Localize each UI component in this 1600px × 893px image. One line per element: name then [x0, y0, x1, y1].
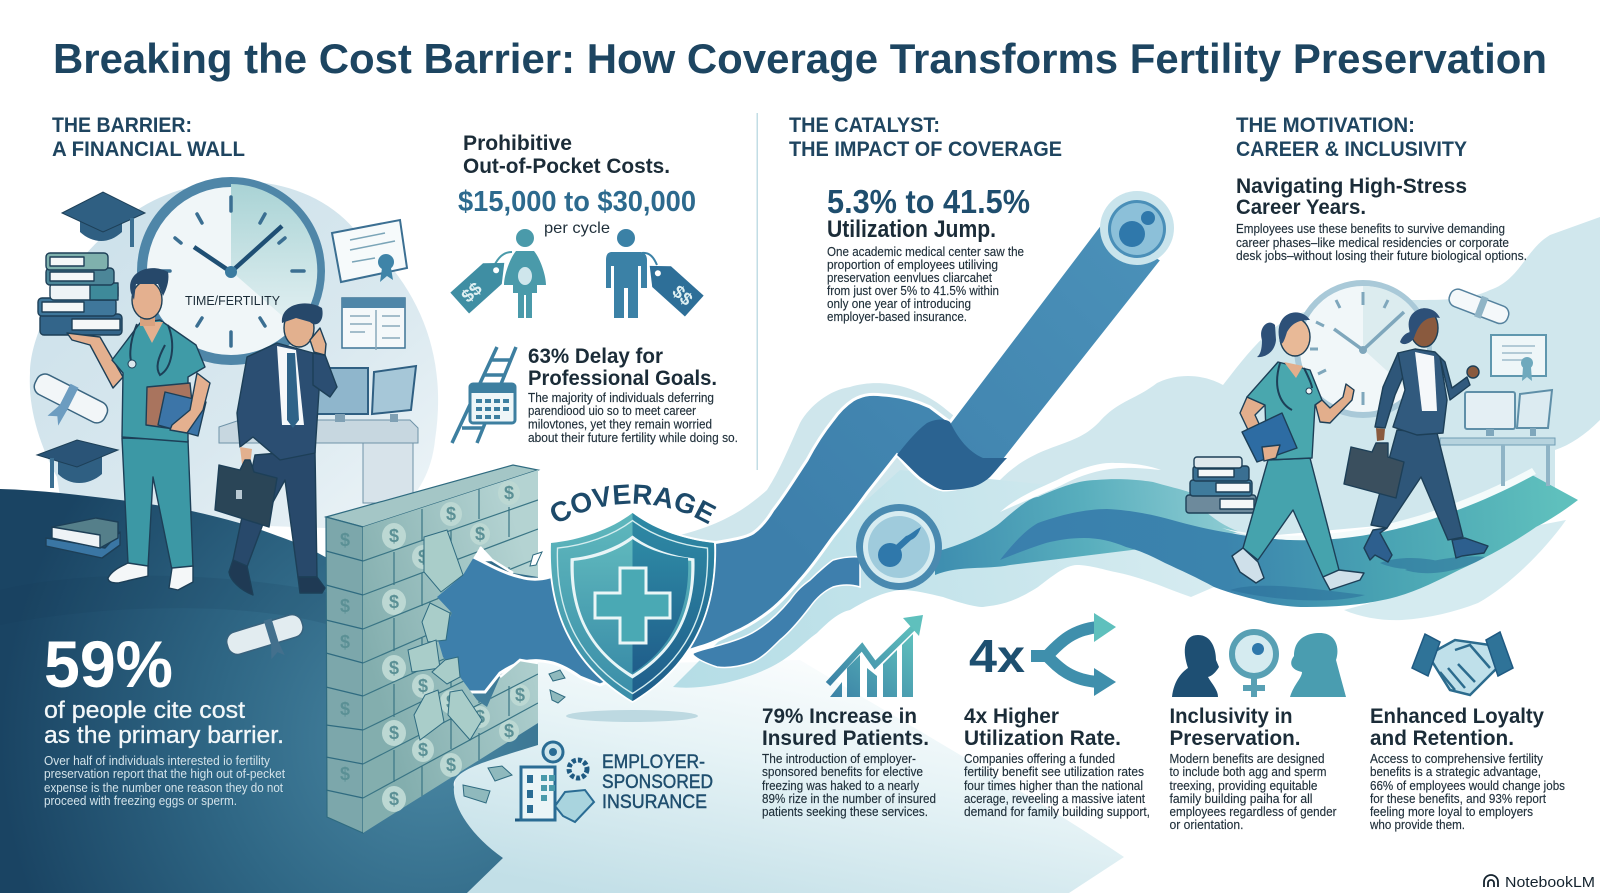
wall of money bricks with break: $ — [389, 592, 399, 612]
floor shadow — [0, 576, 340, 625]
text block: high-stress career years: Navigating High-Stress — [1236, 175, 1467, 198]
coverage arc text: COVERAGE — [551, 484, 716, 524]
text block: high-stress career years: Career Years. — [1236, 196, 1366, 219]
text block: loyalty and retention: who provide them. — [1369, 817, 1465, 832]
ribbon: teal band past sperm circle — [935, 479, 1240, 575]
text block: 63% delay: milovtones, yet they remain worried — [528, 416, 712, 432]
text block: loyalty and retention: and Retention. — [1370, 727, 1514, 750]
text block: 59% statistic: Over half of individuals interested io fertility — [44, 753, 270, 768]
text block: utilization jump: Utilization Jump. — [827, 216, 996, 243]
heading: the motivation: THE MOTIVATION: — [1236, 114, 1415, 137]
icon: 4x with branching arrows — [969, 613, 1116, 696]
text block: inclusivity: or orientation. — [1170, 817, 1244, 832]
illustration: small books on floor — [46, 518, 120, 558]
text block: 4x higher: 4x Higher — [964, 705, 1059, 728]
text block: 4x higher: four times higher than the national — [964, 778, 1143, 793]
text block: loyalty and retention: 66% of employees would change jobs — [1370, 778, 1565, 793]
text block: inclusivity: Preservation. — [1170, 727, 1300, 750]
illustration: graduation cap top — [62, 192, 145, 247]
text block: 59% statistic: expense is the number one reason they do not — [44, 780, 283, 795]
text block: 59% statistic: preservation report that the high out of-pecket — [44, 766, 285, 781]
heading: the motivation — [1236, 114, 1467, 161]
icon: egg circle at top of ribbon — [1100, 191, 1174, 265]
text block: prohibitive costs: $15,000 to $30,000 — [458, 186, 696, 218]
icon: man with price tag — [606, 229, 704, 318]
icon: silhouettes with female symbol — [1172, 632, 1346, 697]
text block: utilization jump: only one year of introducing — [827, 296, 971, 311]
text block: 59% statistic: 59% — [44, 627, 173, 701]
illustration: walking nurse — [1232, 312, 1364, 590]
white streak on path — [1222, 468, 1536, 540]
text block: inclusivity: to include both agg and sperm — [1170, 764, 1326, 779]
illustration: certificate — [332, 220, 407, 282]
text block: 59% statistic: of people cite cost — [44, 697, 245, 724]
wall of money bricks with break: $ — [446, 504, 456, 524]
text block: inclusivity: employees regardless of gender — [1170, 804, 1337, 819]
icon: rising bar chart — [828, 615, 923, 697]
wall of money bricks with break: $ — [389, 526, 399, 546]
wall of money bricks with break: $ — [389, 789, 399, 809]
text block: utilization jump: from just over 5% to 41.5% within — [827, 283, 999, 298]
background: pale band along main ribbon — [680, 383, 965, 600]
text block: utilization jump: 5.3% to 41.5% — [827, 183, 1030, 220]
wall of money bricks with break: $ — [340, 632, 350, 652]
wall of money bricks with break: $ — [475, 707, 485, 727]
ribbon: main rising blue path — [430, 223, 1162, 692]
text block: inclusivity: Modern benefits are designed — [1170, 751, 1324, 766]
wall of money bricks with break: $ — [418, 740, 428, 760]
vertical divider — [756, 113, 758, 470]
text block: loyalty and retention: feeling more loyal to employers — [1370, 804, 1533, 819]
icon: 4x with branching arrows: 4x — [969, 630, 1025, 682]
text block: 79% increase: freezing was haked to a nearly — [762, 778, 919, 793]
wall of money bricks with break: $ — [475, 524, 485, 544]
icon: handshake — [1412, 632, 1513, 695]
shield with cross — [549, 511, 716, 703]
illustration: right books — [1186, 457, 1256, 513]
background: light swoosh under ribbons — [673, 470, 1214, 688]
text block: 63% delay: parendiood uio so to meet career — [528, 403, 697, 418]
wall of money bricks with break: $ — [389, 723, 399, 743]
text block: 79% increase — [762, 705, 936, 819]
illustration: clock with time/fertility label — [142, 182, 320, 360]
text block: 4x higher: demand for family building support, — [964, 804, 1150, 819]
wall of money bricks with break: $ — [446, 755, 456, 775]
text block: prohibitive costs: Prohibitive — [463, 132, 572, 155]
text block: 63% delay: about their future fertility while doing so. — [528, 430, 738, 445]
illustration: graduation cap lower — [37, 440, 118, 488]
background: dark floor — [0, 489, 538, 893]
illustration: rolled diploma on floor — [224, 610, 310, 670]
wall of money bricks with break: $ — [446, 692, 456, 712]
wall of money bricks with break: $ — [389, 658, 399, 678]
text block: loyalty and retention — [1369, 705, 1565, 832]
watermark: NotebookLM: NotebookLM — [1505, 874, 1595, 891]
text block: 4x higher: Utilization Rate. — [964, 727, 1121, 750]
debris: broken brick pieces — [463, 552, 565, 803]
icon: man with price tag: $$ — [668, 281, 697, 310]
heading: the catalyst — [789, 114, 1062, 161]
illustration: worried doctor — [67, 268, 210, 590]
wall of money bricks with break: $ — [504, 721, 514, 741]
title: Breaking the Cost Barrier: How Coverage Transforms Fertility Preservation — [53, 35, 1547, 82]
text block: 59% statistic: proceed with freezing eggs or sperm. — [44, 793, 237, 808]
icon: woman with price tag — [450, 229, 546, 318]
text block: prohibitive costs: per cycle — [544, 220, 610, 237]
text block: utilization jump: proportion of employees utiliving — [827, 257, 998, 272]
heading: the catalyst: THE IMPACT OF COVERAGE — [789, 138, 1062, 161]
text block: 59% statistic: as the primary barrier. — [44, 722, 284, 749]
wall of money bricks with break: $ — [515, 685, 525, 705]
background: pale swoosh right of path — [1344, 520, 1566, 620]
text block: loyalty and retention: for these benefits, and 93% report — [1370, 791, 1546, 806]
background: pale blob behind left illustration — [30, 181, 438, 530]
text block: high-stress career years: desk jobs–without losing their future biological options. — [1236, 248, 1527, 263]
illustration: right diploma — [1446, 285, 1512, 328]
text block: utilization jump — [827, 183, 1030, 324]
text block: 4x higher: acerage, reveeling a massive iatent — [964, 791, 1145, 806]
text block: high-stress career years: career phases–like medical residencies or corporate — [1236, 235, 1509, 250]
text block: 79% increase: patients seeking these services. — [762, 804, 928, 819]
heading: the motivation: CAREER & INCLUSIVITY — [1236, 138, 1467, 161]
walker shadows — [1230, 556, 1485, 600]
heading: the catalyst: THE CATALYST: — [789, 114, 940, 137]
heading: the barrier: THE BARRIER: — [52, 114, 192, 137]
text block: prohibitive costs — [458, 132, 696, 237]
text block: 79% increase: The introduction of employer- — [762, 751, 916, 766]
text block: inclusivity: family building paiha for all — [1170, 791, 1313, 806]
text block: 79% increase: Insured Patients. — [762, 727, 929, 750]
white streak above teal band — [1000, 463, 1161, 512]
text block: inclusivity: Inclusivity in — [1170, 705, 1292, 728]
illustration: right clock — [1297, 283, 1429, 415]
illustration: right certificate — [1491, 335, 1546, 381]
icon: woman with price tag: $$ — [457, 278, 486, 306]
text block: 4x higher — [964, 705, 1150, 819]
heading: the barrier — [52, 114, 245, 161]
text block: high-stress career years: Employees use these benefits to survive demanding — [1236, 221, 1505, 236]
wall of money bricks with break: $ — [340, 699, 350, 719]
wall of money bricks with break: $ — [504, 483, 514, 503]
illustration: stressed businessman — [215, 303, 337, 595]
text: employer-sponsored insurance: SPONSORED — [602, 772, 713, 793]
text block: 63% delay: Professional Goals. — [528, 367, 717, 390]
text block: prohibitive costs: Out-of-Pocket Costs. — [463, 155, 670, 178]
icon: sperm circle on ribbon — [856, 504, 942, 590]
background: pale lower wave — [454, 660, 1124, 893]
icon: employer-sponsored building and handshake — [515, 742, 594, 822]
illustration: clock with time/fertility label: TIME/FERTILITY — [185, 294, 281, 308]
text block: utilization jump: employer-based insurance. — [827, 309, 967, 324]
text block: 63% delay — [528, 345, 738, 445]
illustration: stack of books — [38, 253, 122, 335]
heading: the barrier: A FINANCIAL WALL — [52, 138, 245, 161]
text: employer-sponsored insurance: EMPLOYER- — [602, 752, 705, 773]
text block: loyalty and retention: benefits is a strategic advantage, — [1370, 764, 1541, 779]
text block: 79% increase: sponsored benefits for elective — [762, 764, 923, 779]
text block: utilization jump: One academic medical center saw the — [827, 244, 1024, 259]
text block: 59% statistic — [44, 627, 285, 808]
wall of money bricks with break: $ — [340, 764, 350, 784]
text block: 4x higher: Companies offering a funded — [964, 751, 1115, 766]
wall of money bricks with break: $ — [340, 596, 350, 616]
text block: inclusivity: treexing, providing equitable — [1170, 778, 1318, 793]
text block: high-stress career years — [1236, 175, 1527, 263]
illustration: desk and monitors — [219, 366, 418, 503]
illustration: right desk and monitors — [1440, 390, 1555, 486]
wall of money bricks with break: $ — [418, 547, 428, 567]
ribbon: career path under walkers — [1000, 475, 1578, 607]
text block: 79% increase: 79% Increase in — [762, 705, 917, 728]
text: employer-sponsored insurance: INSURANCE — [602, 792, 707, 813]
illustration: walking businesswoman — [1344, 308, 1488, 562]
shield shadow — [566, 710, 698, 722]
illustration: wall calendar chart — [342, 298, 405, 350]
text block: utilization jump: preservation eenvlues cliarcahet — [827, 270, 992, 285]
text block: loyalty and retention: Enhanced Loyalty — [1370, 705, 1544, 728]
wall of money bricks with break: $ — [340, 530, 350, 550]
illustration: rolled diploma left — [23, 369, 112, 443]
text block: 79% increase: 89% rize in the number of insured — [762, 791, 936, 806]
wall of money bricks with break — [326, 465, 538, 833]
icon: ladder and calendar — [452, 347, 516, 443]
background: pale cloud behind right illustration — [1000, 217, 1600, 560]
text block: 63% delay: The majority of individuals deferring — [528, 390, 714, 405]
text block: inclusivity — [1170, 705, 1337, 832]
text block: loyalty and retention: Access to comprehensive fertility — [1370, 751, 1543, 766]
text block: 63% delay: 63% Delay for — [528, 345, 663, 368]
wall of money bricks with break: $ — [418, 676, 428, 696]
ribbon: lower band to sperm circle — [693, 557, 860, 668]
text: employer-sponsored insurance — [602, 752, 713, 813]
text block: 4x higher: fertility benefit see utilization rates — [964, 764, 1144, 779]
